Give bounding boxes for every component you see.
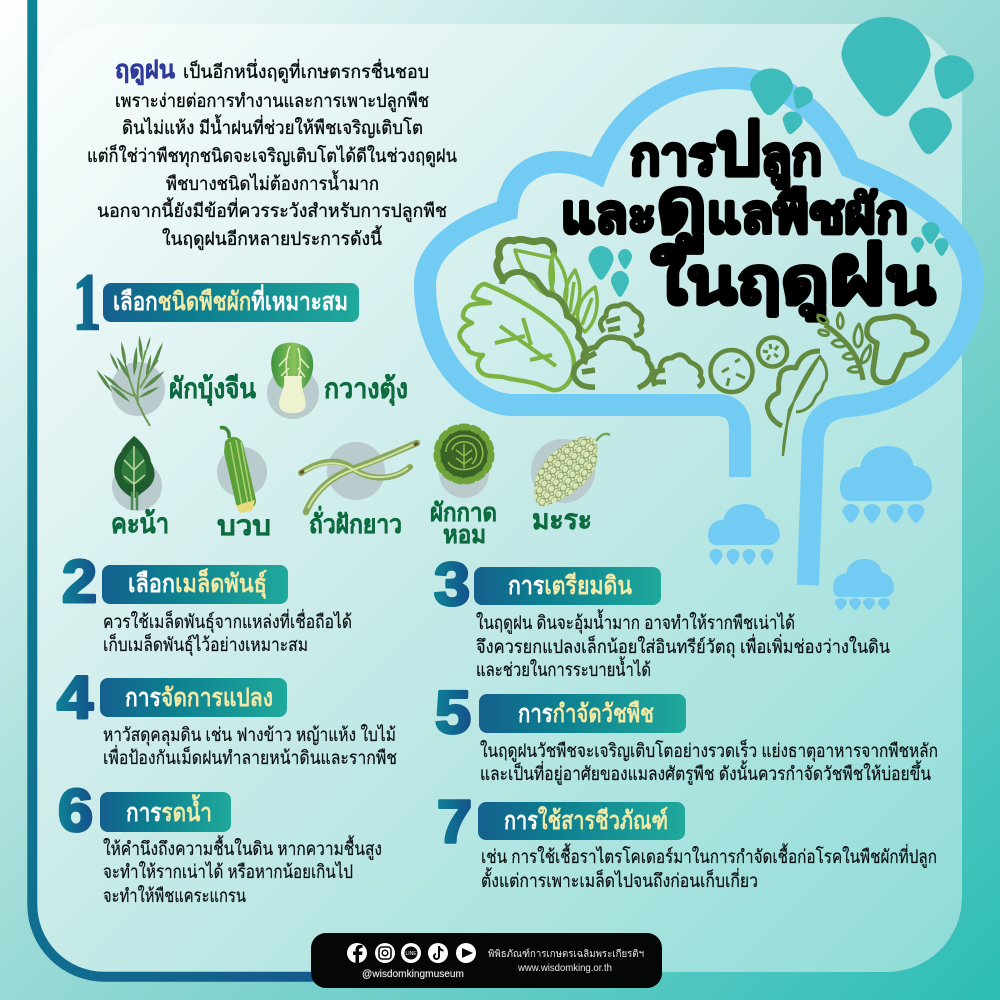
icon: instagram xyxy=(375,943,395,963)
title: ในฤดู ฝน xyxy=(651,227,935,321)
section 4: การจัดการแปลง xyxy=(125,684,273,712)
line art: pointed mint leaves xyxy=(515,250,597,332)
section 5: การกำจัดวัชพืช xyxy=(518,700,654,728)
section 3: และช่วยในการระบายน้ำได้ xyxy=(476,656,651,680)
icon: facebook xyxy=(347,943,367,963)
section 7 xyxy=(437,788,937,891)
vegetable: bitter melon xyxy=(531,434,610,506)
label: bok choy: กวางตุ้ง xyxy=(324,373,408,406)
line art: broccoli small xyxy=(600,304,642,336)
line art: cucumber slice small xyxy=(758,338,787,366)
section 2: 2 xyxy=(62,548,97,615)
vegetable: lettuce xyxy=(437,427,491,498)
section 5: และเป็นที่อยู่อาศัยของแมลงศัตรูพืช ดังนั้นควรกำจัดวัชพืชให้บ่อยขึ้น xyxy=(480,760,931,785)
intro paragraph: เพราะง่ายต่อการทำงานและการเพาะปลูกพืช xyxy=(115,90,429,112)
intro paragraph: ในฤดูฝนอีกหลายประการดังนี้ xyxy=(162,225,382,250)
vegetable: bok choy xyxy=(267,343,319,419)
frame bar xyxy=(32,0,335,977)
section 2: ควรใช้เมล็ดพันธุ์จากแหล่งที่เชื่อถือได้ xyxy=(103,609,352,634)
label: lettuce xyxy=(430,499,497,549)
intro paragraph: พืชบางชนิดไม่ต้องการน้ำมาก xyxy=(166,170,379,194)
section 4: 4 xyxy=(57,664,94,731)
cloud outline with pipes xyxy=(425,78,973,585)
line art: scalloped leaf xyxy=(767,351,827,455)
section 5: 5 xyxy=(435,679,471,746)
section 1 heading xyxy=(73,259,359,347)
section 3: การเตรียมดิน xyxy=(508,572,632,600)
label: lettuce: หอม xyxy=(443,521,486,549)
section 4: เพื่อป้องกันเม็ดฝนทำลายหน้าดินและรากพืช xyxy=(103,745,397,768)
section 1 heading: 1 xyxy=(73,259,101,347)
label: luffa: บวบ xyxy=(217,510,271,541)
line art: broccoli floret xyxy=(867,316,927,383)
label: kale: คะน้า xyxy=(111,508,169,539)
line art: lettuce veins xyxy=(495,318,556,366)
line art: broccoli large xyxy=(574,337,652,388)
section 6 xyxy=(58,777,382,906)
section 2: เลือกเมล็ดพันธุ์ xyxy=(128,568,267,600)
footer museum name: พิพิธภัณฑ์การเกษตรเฉลิมพระเกียรติฯ xyxy=(488,948,644,960)
teal rain drops, top right xyxy=(748,17,979,156)
footer bar xyxy=(311,933,662,988)
vegetable: kale xyxy=(112,436,162,511)
line art vegetables in cloud xyxy=(459,239,927,455)
line art: broccoli right xyxy=(653,355,703,387)
section 4 xyxy=(57,664,397,768)
icon: youtube play xyxy=(456,943,476,963)
section 6: จะทำให้พืชแคระแกรน xyxy=(103,885,246,906)
section 7: การใช้สารชีวภัณฑ์ xyxy=(504,805,668,835)
vegetable: luffa xyxy=(217,428,267,513)
line art: cucumber slice large xyxy=(710,350,752,392)
title xyxy=(561,107,935,321)
line art: sprig xyxy=(818,313,871,380)
label: lettuce: ผักกาด xyxy=(430,499,497,527)
section 7: 7 xyxy=(437,788,472,855)
section 6: 6 xyxy=(58,777,93,844)
line art: large lettuce leaf xyxy=(459,284,574,390)
vegetable: long beans xyxy=(300,442,418,512)
section 2 xyxy=(62,548,352,657)
small blue rain clouds xyxy=(708,446,932,610)
label: water spinach: ผักบุ้งจีน xyxy=(169,373,256,406)
section 2: เก็บเมล็ดพันธุ์ไว้อย่างเหมาะสม xyxy=(103,632,308,657)
section 5 xyxy=(435,679,938,785)
intro paragraph: นอกจากนี้ยังมีข้อที่ควรระวังสำหรับการปลูกพืช xyxy=(97,197,447,222)
intro paragraph: เป็นอีกหนึ่งฤดูที่เกษตรกรชื่นชอบ xyxy=(183,59,429,83)
intro paragraph: ดินไม่แห้ง มีน้ำฝนที่ช่วยให้พืชเจริญเติบโต xyxy=(122,114,423,139)
footer website: www.wisdomking.or.th xyxy=(517,963,612,974)
section 4: หาวัสดุคลุมดิน เช่น ฟางข้าว หญ้าแห้ง ใบไม้ xyxy=(103,724,396,747)
section 3: จึงควรยกแปลงเล็กน้อยใส่อินทรีย์วัตถุ เพื่อเพิ่มช่องว่างในดิน xyxy=(476,634,890,659)
intro paragraph: แต่ก็ใช่ว่าพืชทุกชนิดจะเจริญเติบโตได้ดีในช่วงฤดูฝน xyxy=(87,143,457,168)
intro paragraph: ฤดูฝน xyxy=(115,56,175,86)
section 1 heading: เลือกชนิดพืชผักที่เหมาะสม xyxy=(113,284,348,316)
icon: tiktok xyxy=(428,943,448,963)
footer handle: @wisdomkingmuseum xyxy=(362,968,464,980)
label: bitter melon: มะระ xyxy=(532,504,592,535)
section 3 xyxy=(434,551,890,680)
line art: dark scalloped leaf xyxy=(502,272,586,364)
section 6: จะทำให้รากเน่าได้ หรือหากน้อยเกินไป xyxy=(103,861,353,882)
section 3: 3 xyxy=(434,551,470,618)
section 6: การรดน้ำ xyxy=(126,793,212,827)
section 6: ให้คำนึงถึงความชื้นในดิน หากความชื้นสูง xyxy=(103,835,382,860)
title: และดูแลพืชผัก xyxy=(561,164,908,253)
section 3: ในฤดูฝน ดินจะอุ้มน้ำมาก อาจทำให้รากพืชเน่าได้ xyxy=(476,609,795,635)
section 7: ตั้งแต่การเพาะเมล็ดไปจนถึงก่อนเก็บเกี่ยว xyxy=(481,867,758,891)
icon: line xyxy=(401,943,421,963)
title: การปลูก xyxy=(630,107,822,190)
icon: line: LINE xyxy=(405,951,417,957)
line art: back dark leaf xyxy=(497,239,554,282)
vegetable: water spinach xyxy=(95,335,166,426)
teal rain drops beside title xyxy=(588,222,949,297)
label: long beans: ถั่วฝักยาว xyxy=(309,505,402,539)
intro paragraph xyxy=(87,56,457,250)
